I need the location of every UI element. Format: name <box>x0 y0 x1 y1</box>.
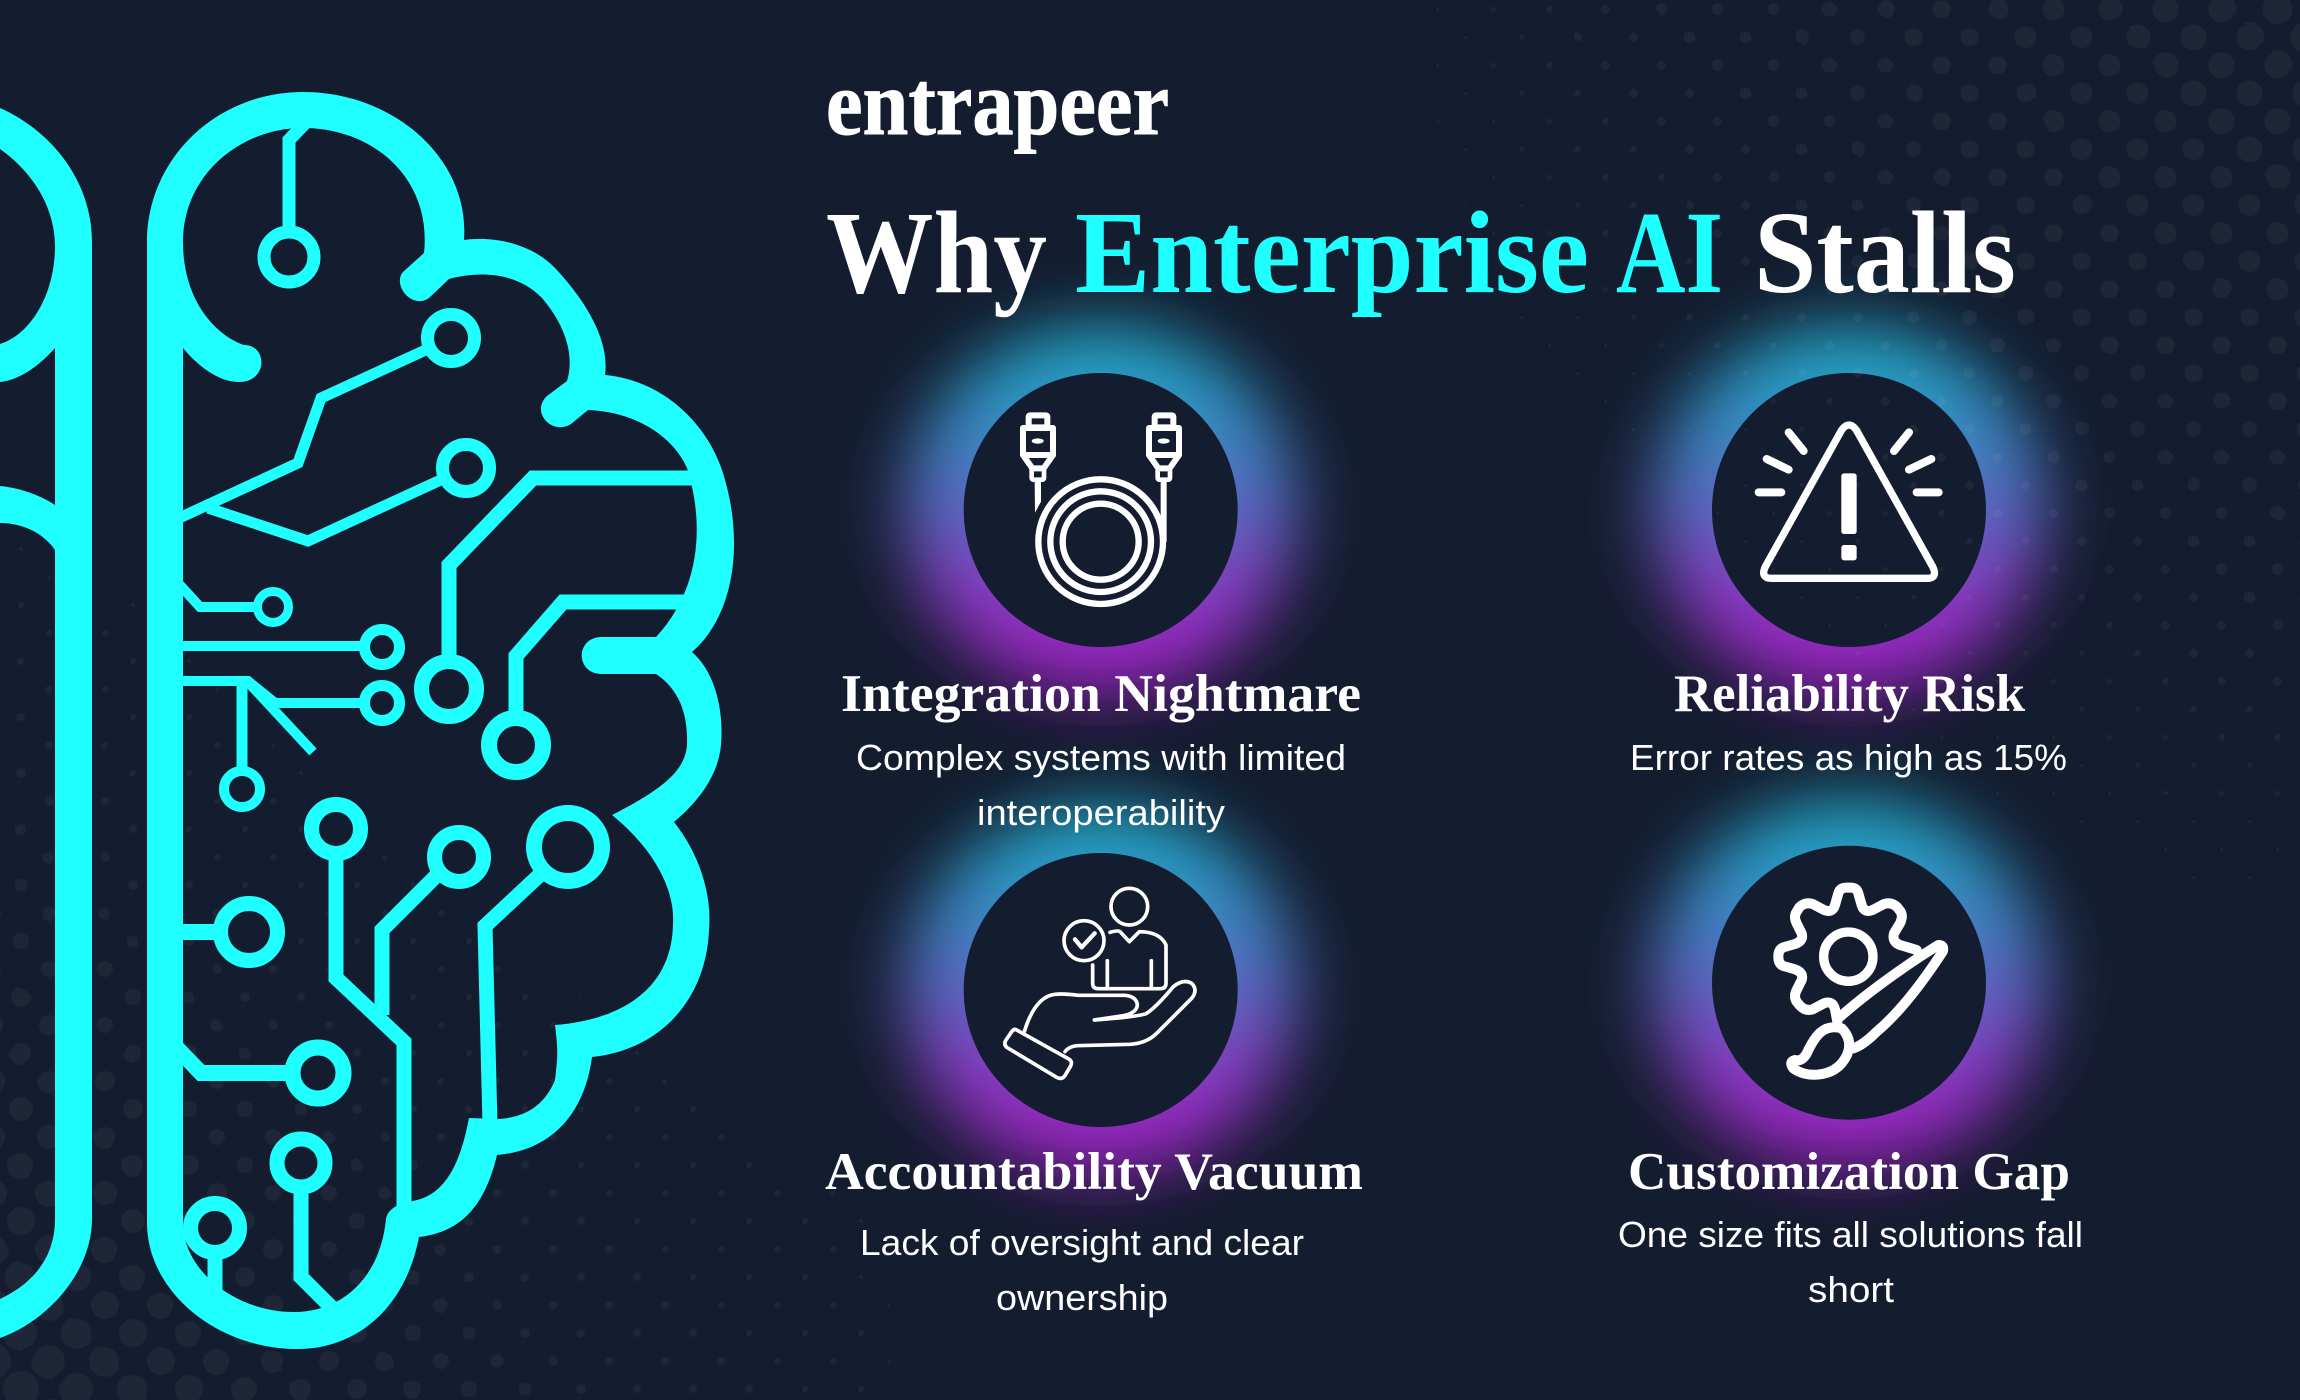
glow: reliability risk <box>1653 328 2045 692</box>
badge: reliability risk <box>1712 373 1986 647</box>
text: integration nightmare description <box>856 737 1346 833</box>
title: Stalls <box>1754 187 2016 318</box>
glow: accountability vacuum <box>905 808 1297 1172</box>
title: Enterprise <box>1075 187 1589 318</box>
text: customization gap description <box>1618 1214 2083 1310</box>
glow: customization gap <box>1653 801 2045 1165</box>
icon: cable <box>1023 415 1179 604</box>
logo: entrapeer: entrapeer <box>826 52 1169 154</box>
left hemisphere, cropped <box>0 108 92 1338</box>
brain circuit illustration <box>0 92 734 1349</box>
glow: integration nightmare <box>905 328 1297 692</box>
title: Why <box>826 187 1047 318</box>
circuit nodes <box>190 232 602 1252</box>
heading: integration nightmare: Integration Nightmare <box>841 665 1361 723</box>
text: reliability risk description: Error rates as high as 15% <box>1630 737 2067 778</box>
icon: warning triangle <box>1759 425 1939 578</box>
right hemisphere outline <box>147 92 734 1349</box>
text: accountability vacuum description: ownership <box>996 1277 1168 1318</box>
icon: gear and paintbrush <box>1778 888 1943 1075</box>
heading: accountability vacuum: Accountability Vacuum <box>825 1143 1363 1201</box>
heading: customization gap: Customization Gap <box>1628 1143 2070 1201</box>
badge: integration nightmare <box>964 373 1238 647</box>
text: customization gap description: One size fits all solutions fall <box>1618 1214 2083 1255</box>
text: customization gap description: short <box>1808 1269 1894 1310</box>
text: accountability vacuum description: Lack of oversight and clear <box>860 1222 1304 1263</box>
heading: reliability risk: Reliability Risk <box>1674 665 2026 723</box>
circuit traces <box>175 116 695 1312</box>
title <box>826 187 2016 318</box>
text: integration nightmare description: interoperability <box>977 792 1225 833</box>
icon: hand holding person <box>1005 888 1195 1078</box>
title: AI <box>1616 187 1723 318</box>
badge: accountability vacuum <box>964 853 1238 1127</box>
badge: customization gap <box>1712 846 1986 1120</box>
text: integration nightmare description: Complex systems with limited <box>856 737 1346 778</box>
text: accountability vacuum description <box>860 1222 1304 1318</box>
